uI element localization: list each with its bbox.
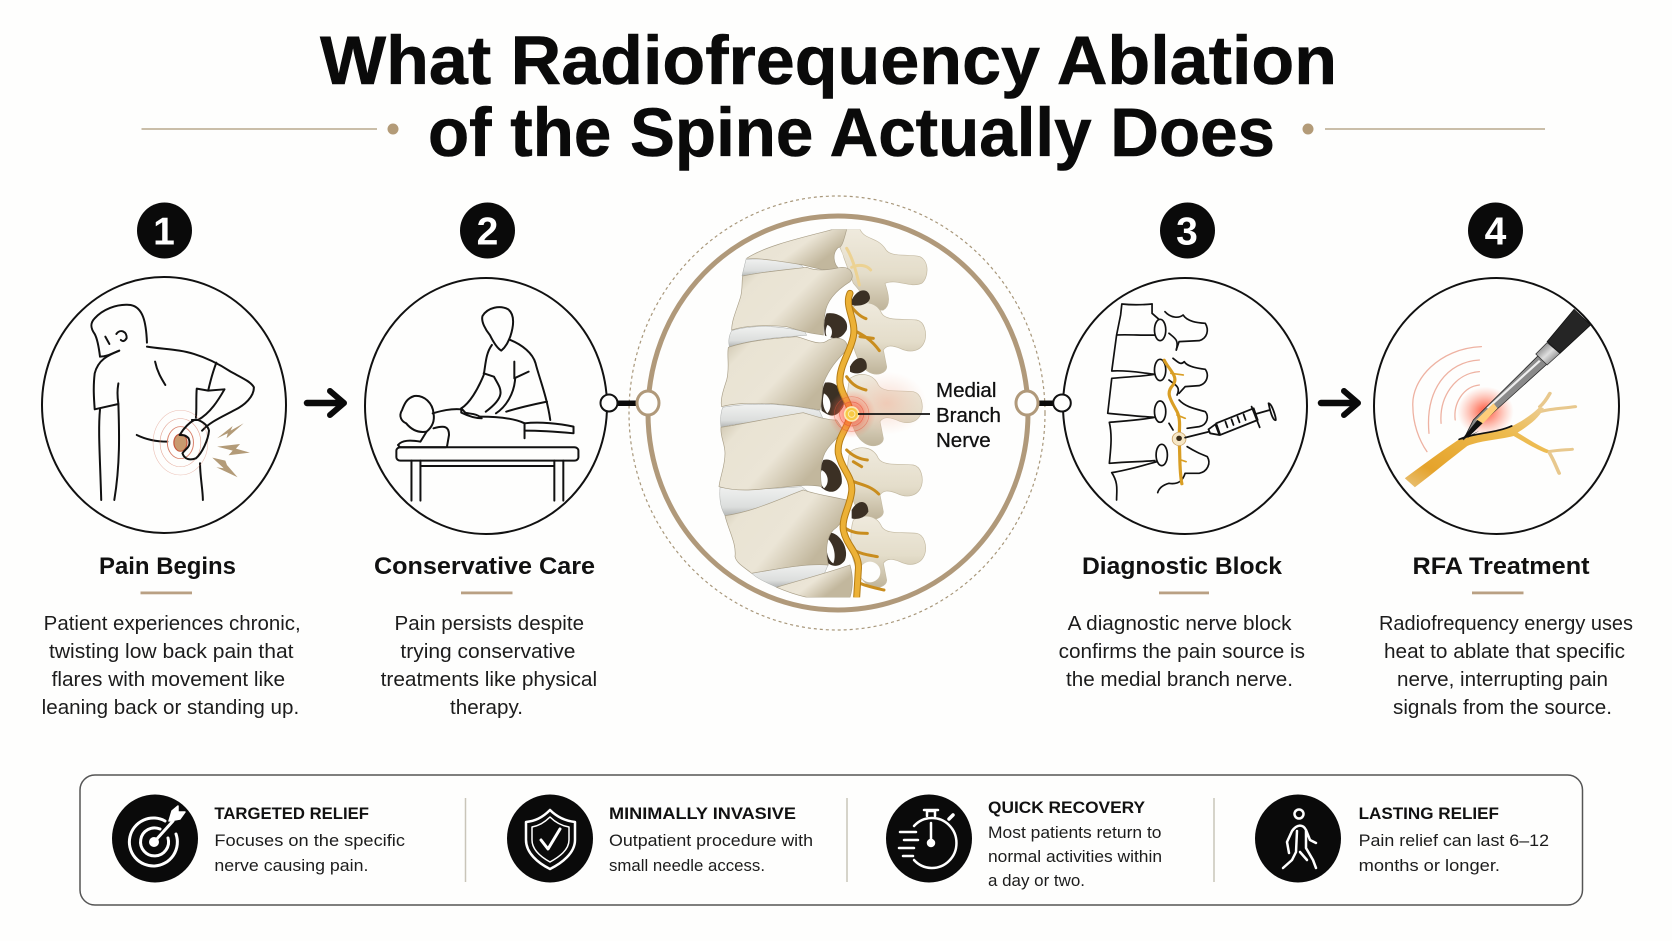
description 2: trying conservative: [400, 641, 575, 663]
therapist: [461, 307, 550, 420]
text: Focuses on the specific: [214, 831, 406, 850]
patient: [398, 396, 574, 447]
warm tint on target process: [865, 378, 914, 428]
nerve: [1164, 360, 1186, 484]
heading: conservative care: Conservative Care: [374, 553, 595, 580]
text: MINIMALLY INVASIVE: [609, 804, 796, 823]
benefit: lasting relief: [1255, 794, 1549, 882]
text: nerve causing pain.: [214, 856, 368, 875]
icon: RF probe ablating nerve: [1405, 309, 1591, 487]
electrode collar: [1536, 343, 1560, 365]
hot spot target: [829, 392, 874, 436]
text: small needle access.: [609, 856, 765, 875]
vertebral bodies: [719, 229, 852, 597]
badge 1: 1: [153, 210, 175, 254]
divider rule: [461, 592, 512, 594]
label: medial branch nerve: Medial: [936, 379, 996, 402]
nerve branches: [843, 305, 884, 590]
dividers: [466, 798, 1214, 882]
icon: target with arrow: [112, 794, 198, 882]
central spine panel: [629, 196, 1045, 630]
icon: shield with check: [507, 794, 593, 882]
electrode handle: [1547, 309, 1591, 353]
description 2: therapy.: [450, 697, 523, 719]
text: QUICK RECOVERY: [988, 798, 1146, 817]
connector right: [1016, 391, 1056, 415]
text: Pain relief can last 6–12: [1359, 831, 1549, 850]
divider rule: [1472, 592, 1524, 594]
table: [396, 447, 578, 501]
electrode hot tip: [1476, 403, 1498, 425]
syringe: [1185, 403, 1276, 438]
benefit: minimally invasive: [507, 794, 813, 882]
benefit: quick recovery: [886, 794, 1162, 890]
badge 4: [1468, 202, 1523, 258]
benefits panel: [80, 775, 1582, 905]
dark foramina: [819, 290, 870, 566]
text: Most patients return to: [988, 823, 1162, 842]
step 4: RFA treatment: [1374, 202, 1633, 719]
description 4: heat to ablate that specific: [1384, 641, 1625, 663]
description 3: [1059, 613, 1305, 691]
connector node: [1053, 394, 1071, 412]
title: of the Spine Actually Does: [428, 94, 1275, 171]
text: LASTING RELIEF: [1359, 804, 1499, 823]
illustration circle 1: [42, 277, 286, 533]
leader line: [858, 413, 930, 415]
description 1: Patient experiences chronic,: [44, 613, 301, 635]
label: medial branch nerve: Branch: [936, 404, 1001, 427]
description 2: [381, 613, 597, 719]
text: TARGETED RELIEF: [214, 804, 369, 823]
nerve and branches: [1405, 393, 1575, 487]
icon: stopwatch: [886, 794, 972, 882]
heat glow: [1457, 387, 1514, 437]
label: medial branch nerve: Nerve: [936, 429, 991, 452]
main ring: [648, 216, 1028, 610]
description 4: Radiofrequency energy uses: [1379, 613, 1633, 635]
divider rule: [140, 592, 192, 594]
text: a day or two.: [988, 871, 1085, 890]
icon: walking person: [1255, 794, 1341, 882]
label: medial branch nerve: [936, 379, 1001, 452]
badge 3: 3: [1176, 210, 1198, 254]
divider rule: [1159, 592, 1209, 594]
heading: diagnostic block: Diagnostic Block: [1082, 553, 1283, 580]
text: months or longer.: [1359, 856, 1500, 875]
title: What Radiofrequency Ablation: [320, 22, 1337, 99]
step 1: pain begins: [42, 202, 301, 719]
dotted outer ring: [629, 196, 1045, 630]
upper faint nerve: [847, 248, 871, 285]
icon: spine with syringe: [1108, 304, 1276, 500]
benefit: targeted relief: [112, 794, 406, 882]
illustration circle 3: [1063, 278, 1307, 534]
description 1: flares with movement like: [52, 669, 285, 691]
description 4: signals from the source.: [1393, 697, 1612, 719]
heading: RFA treatment: RFA Treatment: [1412, 553, 1590, 580]
title: [320, 22, 1337, 171]
badge 2: [460, 202, 515, 258]
description 1: [42, 613, 301, 719]
discs: [720, 259, 828, 587]
description 2: Pain persists despite: [394, 613, 584, 635]
panel frame: [80, 775, 1582, 905]
description 4: [1379, 613, 1633, 719]
description 3: confirms the pain source is: [1059, 641, 1305, 663]
electrode shaft: [1463, 356, 1547, 440]
step 2: conservative care: [365, 202, 607, 719]
text: normal activities within: [988, 847, 1162, 866]
description 1: leaning back or standing up.: [42, 697, 299, 719]
step 3: diagnostic block: [1053, 202, 1307, 691]
text: [988, 798, 1162, 890]
heading: pain begins: Pain Begins: [99, 553, 236, 580]
spine illustration: [719, 229, 927, 597]
text: [609, 804, 813, 875]
description 4: nerve, interrupting pain: [1397, 669, 1608, 691]
energy arcs: [1413, 347, 1481, 452]
text: [1359, 804, 1549, 875]
pain rings: [153, 410, 208, 475]
connector left: [600, 391, 659, 415]
description 2: treatments like physical: [381, 669, 597, 691]
white gaps in foramina: [820, 247, 880, 582]
hand: [180, 419, 209, 459]
injection target: [1172, 432, 1186, 446]
icon: man holding lower back: [91, 305, 254, 500]
transverse processes: [833, 229, 927, 587]
description 1: twisting low back pain that: [49, 641, 294, 663]
text: Outpatient procedure with: [609, 831, 813, 850]
arrow 1 to 2: [307, 391, 344, 415]
badge 1: [137, 202, 192, 258]
badge 3: [1160, 202, 1215, 258]
description 3: the medial branch nerve.: [1066, 669, 1293, 691]
badge 4: 4: [1485, 210, 1507, 254]
icon: therapist massaging patient on table: [396, 307, 578, 501]
text: [214, 804, 406, 875]
illustration circle 4: [1374, 278, 1619, 534]
badge 2: 2: [477, 210, 498, 254]
arrow 3 to 4: [1321, 391, 1358, 415]
description 3: A diagnostic nerve block: [1068, 613, 1293, 635]
main nerve: [838, 293, 858, 597]
icon: pain bolts: [212, 423, 250, 477]
illustration circle 2: [365, 278, 607, 534]
